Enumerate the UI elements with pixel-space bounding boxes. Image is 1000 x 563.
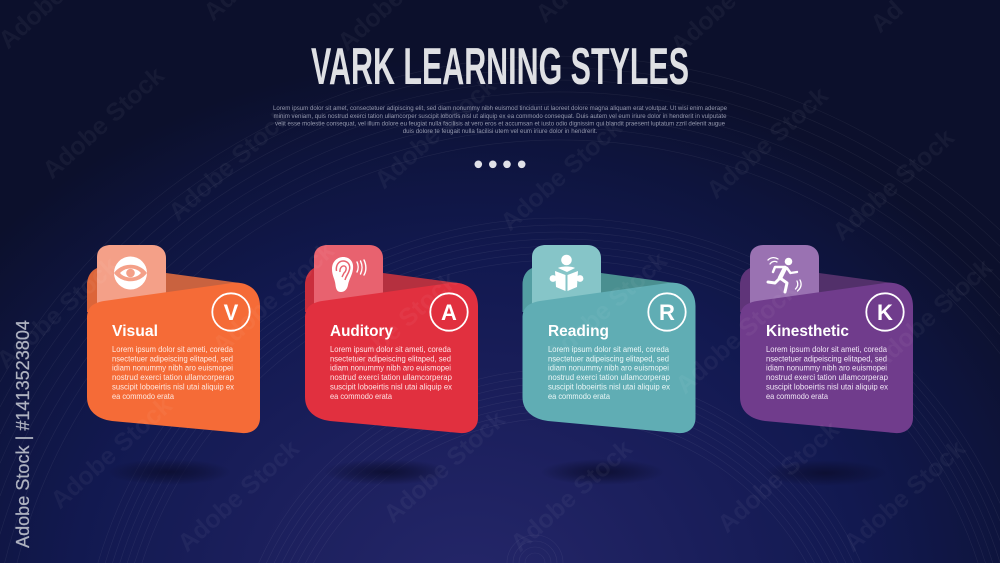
body text: visual: nostrud exerci tation ullamcorperap xyxy=(112,372,234,382)
letter badge: V xyxy=(212,293,250,331)
floor shadow: visual xyxy=(107,459,231,485)
watermark pattern: Adobe Stock xyxy=(827,123,960,246)
letter badge: A xyxy=(430,293,468,331)
watermark pattern: Adobe Stock xyxy=(670,276,803,399)
letter badge: R xyxy=(648,293,686,331)
body text: kinesthetic: nostrud exerci tation ullamcorperap xyxy=(766,372,888,382)
icon: ear with sound waves xyxy=(332,257,366,292)
letter badge: R: R xyxy=(659,300,675,325)
watermark pattern: Adobe Stock xyxy=(495,113,628,236)
letter badge: K: K xyxy=(877,300,893,325)
letter badge: A: A xyxy=(441,300,457,325)
body text: reading: nostrud exerci tation ullamcorperap xyxy=(548,372,670,382)
heading: Reading: Reading xyxy=(548,323,609,340)
letter badge: K xyxy=(866,293,904,331)
body text: visual xyxy=(112,344,235,401)
watermark pattern: Adobe Stock xyxy=(37,61,170,184)
body text: auditory: Lorem ipsum dolor sit ameti, coreda xyxy=(330,344,451,354)
pagination dots xyxy=(474,160,526,168)
intro paragraph: duis dolore te feugait nulla facilisi utem vel eum iriure dolor in hendrerit. xyxy=(403,128,598,135)
watermark pattern: Adobe Stock xyxy=(163,103,296,226)
intro paragraph xyxy=(273,105,727,135)
watermark pattern: Adobe Stock xyxy=(45,391,178,514)
letter badge: V: V xyxy=(224,300,239,325)
body text: reading xyxy=(548,344,671,401)
body text: auditory: nostrud exerci tation ullamcorperap xyxy=(330,372,452,382)
watermark pattern: Adobe Stock xyxy=(838,434,971,557)
body text: kinesthetic: idiam nonummy nibh aro euismopei xyxy=(766,363,887,373)
watermark pattern: Adobe Stock xyxy=(369,71,502,194)
intro paragraph: Lorem ipsum dolor sit amet, consectetuer adipiscing elit, sed diam nonummy nibh euismod tincidunt ut laoreet dolore magna aliquam erat volutpat. Ut wisi enim aderape xyxy=(273,105,727,112)
body text: auditory xyxy=(330,344,453,401)
panel: kinesthetic xyxy=(740,245,913,433)
body text: reading: Lorem ipsum dolor sit ameti, coreda xyxy=(548,344,669,354)
body text: auditory: suscipit loboeirtis nisl utai aliquip ex xyxy=(330,382,453,392)
intro paragraph: velit esse molestie consequat, vel illum dolore eu feugiat nulla facilisis at vero eros et accumsan et iusto odio dignissim qui blandit praesent luptatum zzril delenit augue xyxy=(275,120,725,128)
heading: Visual: Visual xyxy=(112,323,158,340)
panel: reading xyxy=(522,245,696,433)
heading: Auditory: Auditory xyxy=(330,323,393,340)
body text: visual: nsectetuer adipeiscing elitaped, sed xyxy=(112,354,233,364)
floor shadow: reading xyxy=(541,459,665,485)
body text: visual: suscipit loboeirtis nisl utai aliquip ex xyxy=(112,382,235,392)
watermark pattern: Adobe Stock xyxy=(505,434,638,557)
body text: reading: nsectetuer adipeiscing elitaped, sed xyxy=(548,354,669,364)
watermark pattern: Adobe Stock xyxy=(701,81,834,204)
body text: auditory: ea commodo erata xyxy=(330,391,392,401)
side credit label: Adobe Stock | #1413523804 xyxy=(13,320,33,548)
panel: visual xyxy=(87,245,260,433)
icon: running person xyxy=(768,258,801,292)
watermark pattern: Adobe Stock xyxy=(378,405,511,528)
watermark pattern: Adobe Stock xyxy=(712,415,845,538)
body text: kinesthetic: suscipit loboeirtis nisl utai aliquip ex xyxy=(766,382,889,392)
body text: auditory: nsectetuer adipeiscing elitaped, sed xyxy=(330,354,451,364)
body text: kinesthetic xyxy=(766,344,889,401)
floor shadow: kinesthetic xyxy=(763,460,887,486)
body text: reading: suscipit loboeirtis nisl utai aliquip ex xyxy=(548,382,671,392)
panel: auditory xyxy=(305,245,478,433)
body text: kinesthetic: nsectetuer adipeiscing elitaped, sed xyxy=(766,354,887,364)
body text: reading: ea commodo erata xyxy=(548,391,610,401)
icon: person reading xyxy=(550,255,583,291)
heading: Kinesthetic: Kinesthetic xyxy=(766,323,849,340)
watermark pattern: Adobe Stock xyxy=(330,266,463,389)
watermark pattern: Adobe Stock xyxy=(865,253,998,376)
intro paragraph: minim veniam, quis nostrud exerci tation ullamcorper suscipit lobortis nisl ut aliquip ex ea commodo consequat. Duis autem vel eum iriure dolor in hendrerit in vulputate xyxy=(274,113,727,120)
body text: reading: idiam nonummy nibh aro euismopei xyxy=(548,363,669,373)
body text: visual: ea commodo erata xyxy=(112,391,174,401)
watermark pattern: Adobe Stock xyxy=(540,246,673,369)
watermark pattern: Adobe Stock xyxy=(207,236,340,359)
icon: eye xyxy=(114,256,147,290)
body text: auditory: idiam nonummy nibh aro euismopei xyxy=(330,363,451,373)
body text: visual: idiam nonummy nibh aro euismopei xyxy=(112,363,233,373)
body text: visual: Lorem ipsum dolor sit ameti, coreda xyxy=(112,344,233,354)
watermark pattern: Adobe Stock xyxy=(172,434,305,557)
body text: kinesthetic: Lorem ipsum dolor sit ameti, coreda xyxy=(766,344,887,354)
floor shadow: auditory xyxy=(324,459,448,485)
body text: kinesthetic: ea commodo erata xyxy=(766,391,828,401)
title: VARK LEARNING STYLES xyxy=(311,38,689,96)
